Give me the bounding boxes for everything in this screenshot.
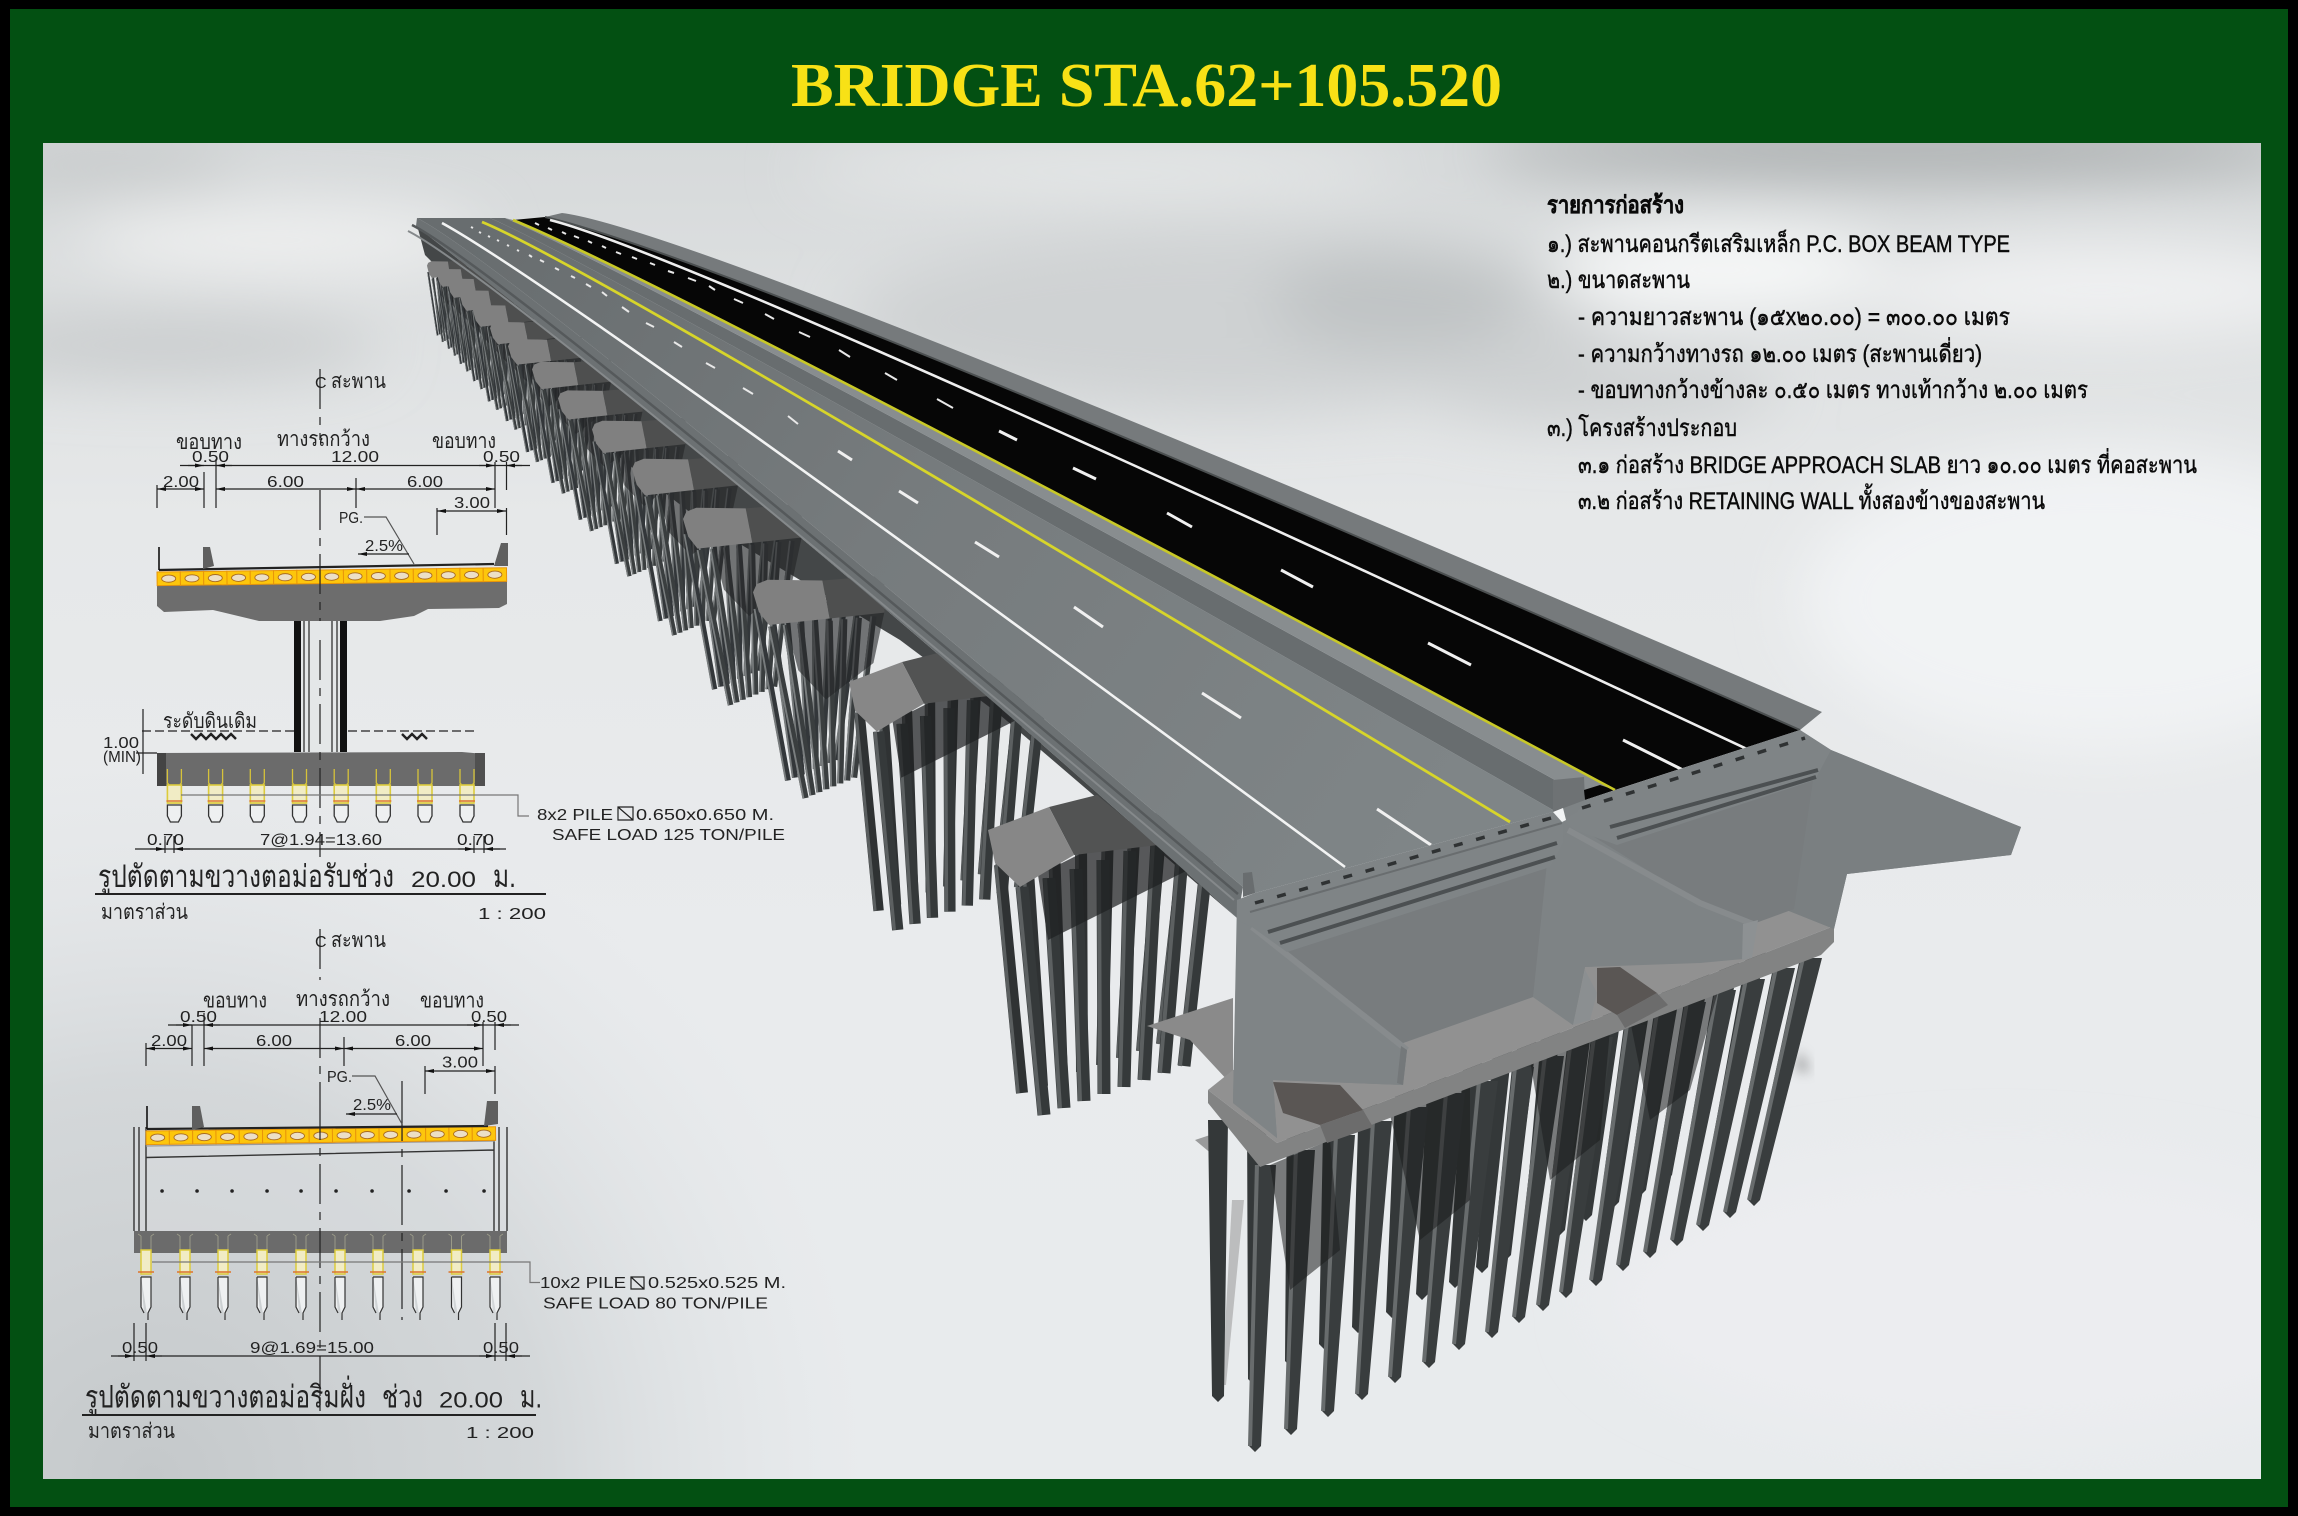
right wing wall (1784, 750, 2021, 929)
pier dimension labels: 7@1.94=13.60 (260, 832, 382, 849)
pier dimension labels: 0.650x0.650 M. (636, 807, 774, 824)
abutment dimension labels (85, 929, 786, 1443)
abutment section geometry (134, 1101, 507, 1320)
pier dimension labels: ทางรถกว้าง (277, 428, 370, 451)
abutment dimension labels: ทางรถกว้าง (296, 988, 390, 1011)
pier dimension labels (98, 370, 785, 924)
abutment piles (1208, 913, 1822, 1452)
right back wall (1575, 780, 1813, 924)
pier dimension labels: (MIN) (103, 749, 141, 766)
left roadway (417, 218, 1553, 893)
abutment dimension labels: 10x2 PILE (540, 1275, 626, 1292)
pier section geometry (157, 543, 508, 822)
pier dimension labels: 0.70 (457, 832, 494, 849)
pier dimension labels: 20.00 (411, 867, 476, 892)
pier dimension lines (95, 369, 633, 894)
pier dimension labels: 8x2 PILE (537, 807, 613, 824)
pier dimension labels: มาตราส่วน (101, 901, 188, 924)
abutment dimension labels: 2.5% (353, 1097, 391, 1114)
pier dimension labels: 0.50 (192, 449, 229, 466)
pier dimension labels: 2.00 (163, 474, 199, 491)
right black roadway (513, 217, 1800, 790)
abutment dimension labels: 9@1.69=15.00 (250, 1340, 374, 1357)
abutment dimension labels: 0.525x0.525 M. (648, 1275, 786, 1292)
pier dimension labels: รูปตัดตามขวางตอม่อรับช่วง (98, 859, 394, 895)
pier dimension labels: 3.00 (454, 495, 490, 512)
construction list text: ๓.๒ ก่อสร้าง RETAINING WALL ทั้งสองข้างของสะพาน (1578, 483, 2045, 515)
under-deck girder shadow (416, 225, 1237, 918)
abutment dimension labels: C (315, 934, 327, 951)
piers behind the deck, far to near (427, 260, 1228, 1115)
median parapet (490, 218, 1584, 810)
pier dimension labels: ขอบทาง (176, 431, 242, 454)
abutment dimension labels: 6.00 (256, 1033, 292, 1050)
abutment dimension labels: 0.50 (471, 1009, 507, 1026)
left back wall (1287, 867, 1550, 1043)
abutment dimension labels: ขอบทาง (203, 990, 267, 1012)
construction list text: - ขอบทางกว้างข้างละ ๐.๕๐ เมตร ทางเท้ากว้าง ๒.๐๐ เมตร (1578, 377, 2088, 404)
construction list text: - ความยาวสะพาน (๑๕x๒๐.๐๐) = ๓๐๐.๐๐ เมตร (1578, 304, 2010, 331)
right deck end beam with grooves (1563, 730, 1831, 845)
right parapet (545, 213, 1822, 730)
abutment (1147, 730, 2021, 1167)
abutment wall mass (1233, 730, 2021, 1138)
pier dimension labels: 6.00 (407, 474, 443, 491)
pier dimension labels: ขอบทาง (432, 430, 496, 453)
pier dimension labels: สะพาน (331, 370, 386, 393)
abutment dimension labels: 0.50 (122, 1340, 158, 1357)
pier dimension labels: 12.00 (331, 449, 379, 466)
abutment dimension labels: ช่วง (382, 1380, 423, 1414)
abutment dimension lines (82, 929, 644, 1415)
ground shadows (1195, 1050, 1810, 1385)
abutment dimension labels: 0.50 (483, 1340, 519, 1357)
abutment dimension labels: SAFE LOAD 80 TON/PILE (543, 1296, 768, 1312)
cross section: abutment, span 20.00 m (82, 929, 786, 1443)
abutment dimension labels: 0.50 (180, 1009, 217, 1026)
pier dimension labels: ระดับดินเดิม (163, 710, 257, 733)
abutment dimension labels: 6.00 (395, 1033, 431, 1050)
construction list text: - ความกว้างทางรถ ๑๒.๐๐ เมตร (สะพานเดี่ยว) (1578, 337, 1982, 368)
left deck end beam with grooves (1237, 812, 1563, 952)
abutment dimension labels: 1 : 200 (466, 1425, 534, 1442)
cross section: pier, span 20.00 m (95, 369, 785, 924)
abutment dimension labels: 3.00 (442, 1054, 478, 1072)
abutment dimension labels: สะพาน (331, 929, 386, 952)
construction list text: ๑.) สะพานคอนกรีตเสริมเหล็ก P.C. BOX BEAM TYPE (1547, 229, 2010, 258)
construction list text: ๒.) ขนาดสะพาน (1547, 267, 1690, 294)
abutment dimension labels: PG. (327, 1069, 352, 1086)
construction list text: ๓.๑ ก่อสร้าง BRIDGE APPROACH SLAB ยาว ๑๐.๐๐ เมตร ที่คอสะพาน (1578, 448, 2197, 479)
pier dimension labels: 1 : 200 (478, 906, 546, 923)
pier dimension labels: ม. (493, 859, 516, 894)
pier dimension labels: 0.50 (483, 449, 520, 466)
bridge deck (408, 213, 1822, 920)
pier dimension labels: 2.5% (365, 538, 403, 555)
abutment dimension labels: มาตราส่วน (88, 1420, 175, 1443)
construction list text: รายการก่อสร้าง (1547, 192, 1684, 219)
pier dimension labels: PG. (339, 510, 363, 527)
pile cap front face (1208, 926, 1834, 1167)
abutment dimension labels: 12.00 (319, 1009, 367, 1026)
pier dimension labels: 6.00 (267, 474, 304, 491)
centre wing wall (1533, 830, 1753, 1025)
abutment dimension labels: รูปตัดตามขวางตอม่อริมฝั่ง (85, 1376, 366, 1416)
construction list text (1547, 192, 2197, 515)
pile cap top surface (1208, 906, 1834, 1143)
pier dimension labels: SAFE LOAD 125 TON/PILE (552, 827, 785, 844)
title: BRIDGE STA.62+105.520 (791, 52, 1502, 120)
pier dimension labels: 1.00 (103, 735, 139, 752)
left wing wall (1233, 920, 1407, 1138)
abutment dimension labels: 20.00 (439, 1388, 503, 1412)
pier dimension labels: C (315, 375, 327, 392)
left back pile cap stub (1147, 998, 1233, 1090)
abutment dimension labels: ขอบทาง (420, 990, 484, 1012)
cap shadows (1273, 1082, 1363, 1125)
left deck fascia (416, 218, 1243, 920)
abutment dimension labels: 2.00 (151, 1033, 187, 1050)
left outer barrier end (1243, 872, 1255, 897)
construction list text: ๓.) โครงสร้างประกอบ (1547, 414, 1737, 442)
expansion gap highlight (1553, 808, 1566, 822)
abutment dimension labels: ม. (520, 1380, 542, 1414)
road markings (442, 223, 1345, 867)
pier dimension labels: 0.70 (147, 832, 184, 849)
